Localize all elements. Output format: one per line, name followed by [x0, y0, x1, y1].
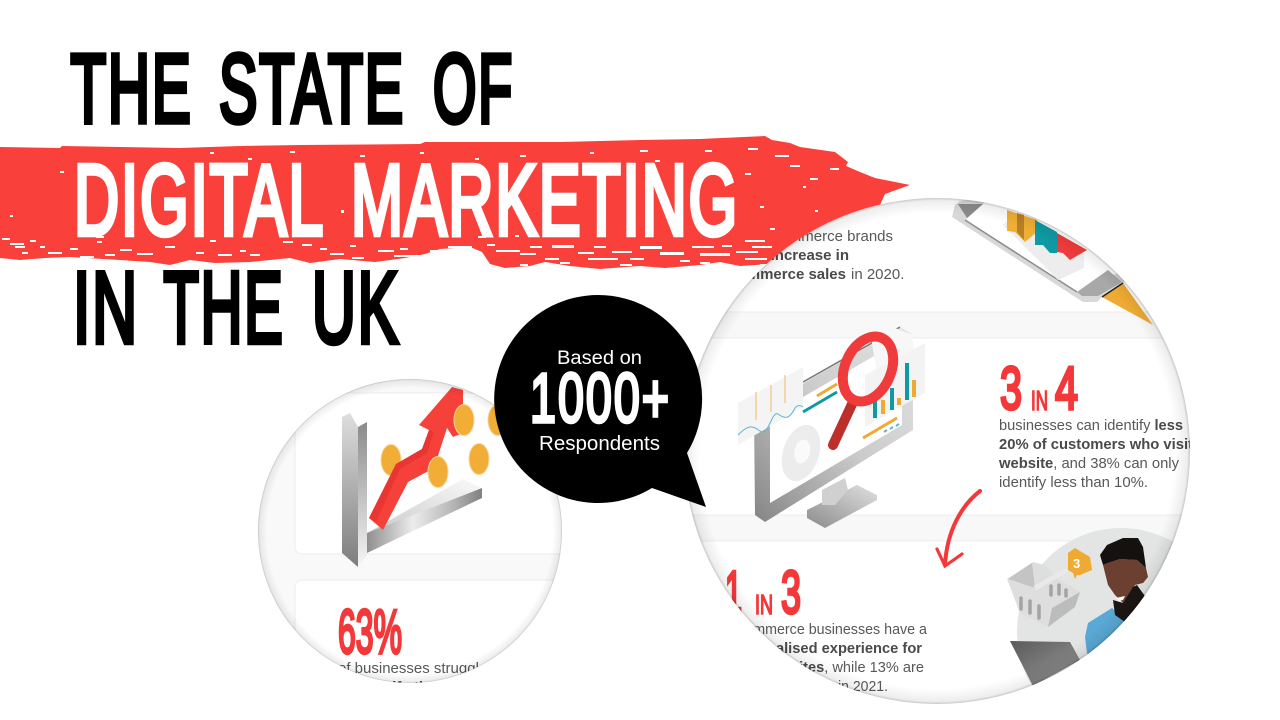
statistic: 1 in 3: 1	[725, 559, 742, 626]
statistic: 1 in 3	[727, 568, 800, 616]
badge	[1068, 548, 1092, 579]
title line: DIGITAL MARKETING: MARKETING	[351, 145, 739, 257]
text: customers identification statistic: 20% of customers who visit	[999, 436, 1193, 453]
icon: monitor with magnifier	[738, 327, 925, 528]
statistic: 3 in 4	[1000, 364, 1078, 412]
text: ecommerce brands line: eCommerce brands	[761, 228, 893, 245]
title line: IN THE UK: UK	[312, 253, 400, 365]
title line: DIGITAL MARKETING	[74, 145, 739, 257]
person	[1085, 538, 1148, 654]
title line: IN THE UK	[73, 253, 400, 365]
statistic: 3 in 4: IN	[1031, 385, 1048, 416]
badge: 3	[1073, 556, 1080, 571]
text: in 2020: in 2020.	[851, 266, 904, 283]
title line: IN THE UK: IN	[73, 253, 139, 365]
icon: growth chart with arrow and coins	[342, 387, 508, 567]
text: personalised experience statistic	[754, 623, 927, 691]
panel: chart card	[294, 392, 560, 554]
text: customers identification statistic: website, and 38% can only	[998, 455, 1179, 472]
text: clipped second line: to identify their	[338, 679, 446, 696]
statistic: 1 in 3: IN	[755, 589, 773, 620]
callout text: Respondents: Respondents	[539, 433, 660, 455]
title line: THE STATE OF: STATE	[219, 34, 405, 143]
statistic: 1 in 3: 3	[781, 559, 801, 626]
title line: DIGITAL MARKETING: DIGITAL	[74, 145, 325, 257]
title line: IN THE UK: THE	[164, 253, 284, 365]
text: customers identification statistic	[998, 417, 1193, 491]
panel: statistic card	[294, 580, 554, 630]
red brush stroke	[0, 136, 910, 275]
statistic: 3 in 4: 4	[1055, 355, 1078, 422]
icon: pencil tip	[1102, 283, 1153, 325]
icon: phone with bar chart	[952, 195, 1153, 325]
text: personalised experience statistic: their websites, while 13% are	[727, 659, 924, 676]
statistic: 63%: 63%	[338, 598, 402, 667]
text: customers identification statistic: identify less than 10%.	[999, 474, 1148, 491]
arrow: red hand-drawn	[937, 491, 980, 566]
text: customers identification statistic: businesses can identify less	[999, 417, 1183, 434]
section divider band	[680, 312, 1200, 338]
text: increase line: an increase in	[749, 247, 849, 264]
callout: based on 1000+ respondents	[494, 295, 706, 507]
title line: THE STATE OF	[70, 34, 514, 143]
statistic: 3 in 4: 3	[1000, 355, 1022, 422]
text: personalised experience statistic: in 2021.	[838, 678, 888, 695]
laptop	[1010, 641, 1080, 686]
basket	[1007, 562, 1080, 627]
callout number: 1000+: 1000+	[530, 359, 671, 437]
callout text: Based on: Based on	[557, 348, 642, 369]
left magnified circle	[258, 379, 562, 683]
title line: THE STATE OF: THE	[70, 34, 192, 143]
text: businesses struggle: of businesses struggle	[338, 660, 487, 677]
text: ecommerce sales line: eCommerce sales	[718, 266, 846, 283]
text: personalised experience statistic: personalised experience for	[727, 640, 922, 657]
text: personalised experience statistic: eCommerce businesses have a	[727, 621, 928, 638]
title line: THE STATE OF: OF	[433, 34, 514, 143]
section divider band	[680, 515, 1200, 541]
icon: person with basket and laptop	[1007, 528, 1173, 686]
right magnified circle	[687, 198, 1190, 704]
